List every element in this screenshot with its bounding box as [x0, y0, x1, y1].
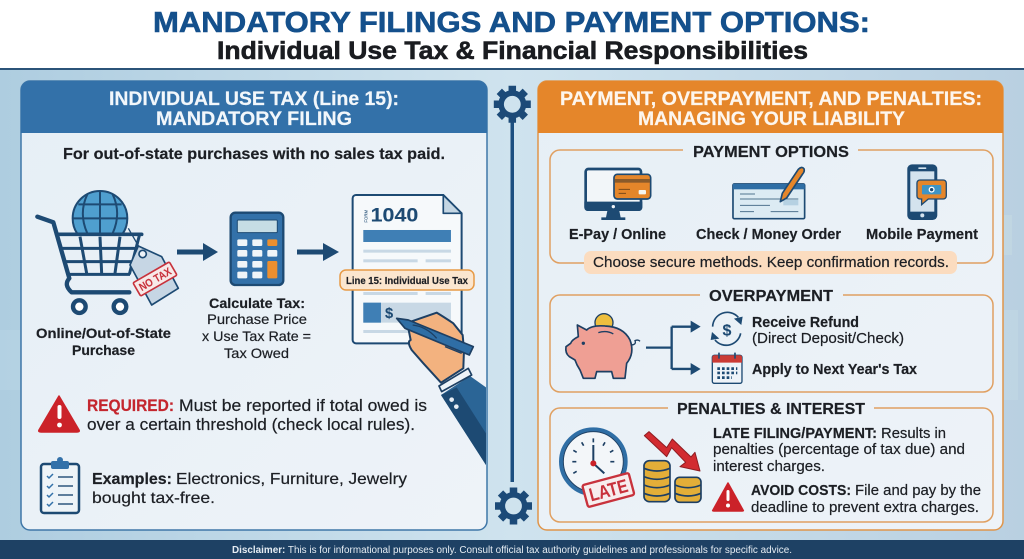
- panel header: individual use tax: INDIVIDUAL USE TAX (Line 15):: [109, 89, 399, 110]
- icon: form 1040: [353, 195, 462, 343]
- caption: calculate tax: [202, 295, 311, 361]
- footer disclaimer: [0, 540, 1024, 559]
- payment option labels: [569, 227, 978, 243]
- caption: calculate tax: Calculate Tax:: [209, 295, 305, 311]
- caption: online purchase: Online/Out-of-State: [36, 325, 171, 341]
- callout: secure methods: [584, 251, 957, 274]
- overpayment options text: Receive Refund: [752, 315, 859, 331]
- title: MANDATORY FILINGS AND PAYMENT OPTIONS:: [153, 7, 870, 39]
- section: payment options: PAYMENT OPTIONS: [693, 144, 849, 161]
- arrow: cart to calculator: [177, 243, 218, 261]
- caption: calculate tax: Tax Owed: [224, 345, 289, 361]
- required note: over a certain threshold (check local rules).: [87, 416, 415, 434]
- overpayment options text: Apply to Next Year's Tax: [752, 362, 917, 378]
- payment option labels: E-Pay / Online: [569, 227, 666, 243]
- section: overpayment: OVERPAYMENT: [709, 288, 833, 305]
- panel: individual use tax: [21, 81, 487, 530]
- callout: secure methods: Choose secure methods. Keep confirmation records.: [593, 254, 949, 271]
- icon: form 1040: $: [385, 306, 393, 322]
- icon: check and pen: [733, 167, 805, 219]
- examples note: Electronics, Furniture, Jewelry: [176, 471, 407, 488]
- examples note: bought tax-free.: [92, 490, 215, 507]
- panel header: individual use tax: [21, 81, 487, 133]
- icon: warning triangle: [39, 396, 79, 432]
- icon: calculator: [231, 213, 283, 285]
- section: payment options: [550, 144, 993, 274]
- icon: piggy bank: [566, 314, 640, 378]
- icon: computer with card: [584, 169, 651, 220]
- icon: clipboard checklist: [41, 457, 79, 513]
- required note: [87, 397, 427, 434]
- panel header: payment: MANAGING YOUR LIABILITY: [638, 109, 905, 130]
- icon: refund: $: [723, 322, 732, 339]
- arrows: split to refund and next year: [646, 321, 701, 375]
- title: Individual Use Tax & Financial Responsibilities: [217, 37, 808, 65]
- panel: payment, overpayment and penalties: [538, 81, 1003, 530]
- overpayment options text: (Direct Deposit/Check): [752, 331, 904, 347]
- icon: warning triangle small: [713, 483, 743, 511]
- icon: shopping cart with globe and no tax tag: [37, 191, 178, 313]
- icon: falling arrow and coins: [644, 432, 701, 502]
- caption: calculate tax: x Use Tax Rate =: [202, 328, 311, 344]
- payment option labels: Check / Money Order: [696, 227, 841, 243]
- caption: online purchase: Purchase: [72, 342, 135, 358]
- icon: hand writing with pen: [397, 313, 486, 465]
- caption: online purchase: [36, 325, 171, 358]
- late filing text: LATE FILING/PAYMENT:: [713, 426, 877, 442]
- examples note: [92, 471, 407, 507]
- center connector with gears: [494, 86, 532, 525]
- section: penalties and interest: PENALTIES & INTEREST: [677, 401, 865, 418]
- late filing text: Results in: [881, 426, 946, 442]
- examples note: Examples:: [92, 471, 172, 488]
- icon: top gear: [494, 86, 531, 123]
- icon: clock with late stamp: [561, 429, 634, 507]
- icon: clock with late stamp: LATE: [587, 475, 630, 505]
- panel header: individual use tax: MANDATORY FILING: [156, 109, 352, 130]
- callout: line 15: Line 15: Individual Use Tax: [346, 275, 468, 287]
- panel header: payment: [538, 81, 1003, 133]
- footer disclaimer: Disclaimer: This is for informational purposes only. Consult official tax authority guidelines and professionals for specific advice.: [232, 545, 792, 556]
- panel header: payment: PAYMENT, OVERPAYMENT, AND PENALTIES:: [560, 89, 982, 110]
- payment option labels: Mobile Payment: [866, 227, 978, 243]
- intro text: For out-of-state purchases with no sales tax paid.: [63, 146, 445, 163]
- avoid costs text: AVOID COSTS:: [751, 482, 851, 499]
- icon: shopping cart with globe and no tax tag: NO TAX: [137, 266, 174, 294]
- caption: calculate tax: Purchase Price: [207, 311, 307, 327]
- late filing text: interest charges.: [713, 459, 825, 475]
- icon: form 1040: FORM: [363, 210, 368, 223]
- section: penalties and interest: [550, 401, 993, 522]
- arrow: calculator to form: [297, 243, 339, 261]
- avoid costs text: deadline to prevent extra charges.: [751, 499, 979, 516]
- required note: REQUIRED:: [87, 397, 174, 415]
- overpayment options text: [752, 315, 917, 378]
- section: overpayment: [550, 288, 993, 392]
- avoid costs text: File and pay by the: [855, 482, 981, 499]
- late filing text: penalties (percentage of tax due) and: [713, 442, 965, 458]
- avoid costs text: [751, 482, 981, 516]
- icon: refund: [711, 312, 743, 345]
- late filing text: [713, 426, 965, 475]
- icon: bottom gear: [495, 488, 532, 524]
- callout: line 15: [340, 270, 474, 290]
- title: [153, 7, 870, 65]
- icon: calendar: [712, 353, 742, 383]
- icon: mobile phone: [907, 164, 946, 220]
- required note: Must be reported if total owed is: [179, 397, 427, 415]
- icon: form 1040: 1040: [371, 206, 418, 227]
